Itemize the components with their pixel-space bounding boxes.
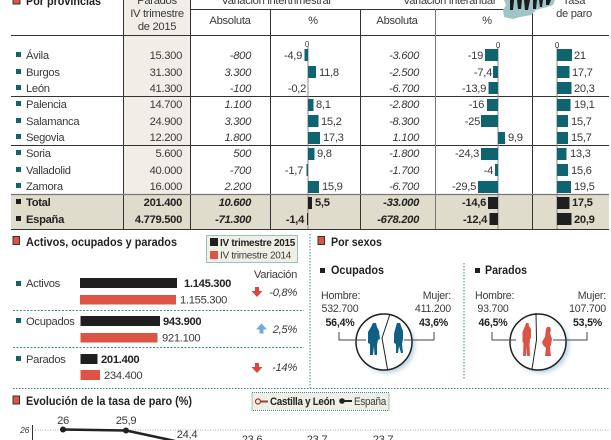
row: ocupados: 943.900 <box>163 316 201 328</box>
line chart: 26 <box>19 425 30 435</box>
row: Valladolid: Valladolid <box>26 165 71 177</box>
row: Burgos <box>16 66 593 79</box>
header: variación: Variación <box>254 269 297 281</box>
legend: castilla y león / españa: Castilla y León <box>270 396 335 408</box>
row: Soria: -1.800 <box>389 148 420 160</box>
row: ocupados: 2,5% <box>272 324 297 336</box>
row: activos: -0,8% <box>269 287 297 299</box>
panel: evolución de la tasa de paro <box>13 392 609 440</box>
row: parados: 201.400 <box>101 354 139 366</box>
row: Total: Total <box>26 197 51 209</box>
row: parados <box>16 354 297 382</box>
row: Ávila: 21 <box>574 50 586 62</box>
row: Total: -33.000 <box>383 197 420 209</box>
row: Zamora <box>16 181 595 193</box>
row: Salamanca: -8.300 <box>389 116 420 128</box>
legend: trimestres: IV trimestre 2014 <box>220 250 291 262</box>
row: Zamora: 16.000 <box>150 181 182 193</box>
row: Ávila: -800 <box>230 50 252 62</box>
table column headers: de 2015 <box>138 21 176 33</box>
legend: trimestres <box>206 236 298 262</box>
row: Burgos: 17,7 <box>572 67 593 79</box>
row: Burgos: 3.300 <box>224 67 252 79</box>
row: Zamora: Zamora <box>26 181 64 193</box>
row: Salamanca: Salamanca <box>26 116 80 128</box>
row: España: -678.200 <box>377 214 420 226</box>
row: activos: 1.155.300 <box>180 294 227 306</box>
row: Ávila <box>16 49 586 62</box>
province rows <box>16 49 595 226</box>
row: parados: Parados <box>26 354 66 366</box>
row: ocupados <box>16 316 297 344</box>
row: España: -12,4 <box>463 214 488 226</box>
axis zero labels: 0 <box>496 41 501 50</box>
row: Valladolid: -1,7 <box>285 165 303 177</box>
row: León: -0,2 <box>288 83 306 95</box>
row: Zamora: 19,5 <box>574 181 595 193</box>
row: Soria: 9,8 <box>317 148 332 160</box>
row: Salamanca: -25 <box>465 116 480 128</box>
group: ocupados: 56,4% <box>325 317 355 329</box>
row: Segovia: 15,7 <box>571 132 592 144</box>
row: León: León <box>26 83 50 95</box>
line chart: 26 <box>57 415 69 427</box>
group: ocupados: Mujer: <box>423 290 451 302</box>
row: Ávila: 15.300 <box>150 50 182 62</box>
row: Palencia: -16 <box>469 99 484 111</box>
row: Valladolid <box>16 164 592 177</box>
axis zero labels: 0 <box>555 41 560 50</box>
heading: evolución: Evolución de la tasa de paro (%) <box>26 394 192 408</box>
table column headers: de paro <box>556 8 592 20</box>
table column headers: Absoluta <box>209 15 252 27</box>
row: parados: -14% <box>272 362 297 374</box>
row: Zamora: -29,5 <box>452 181 476 193</box>
line chart <box>19 415 609 440</box>
row: Valladolid: 40.000 <box>150 165 182 177</box>
legend: trimestres: IV trimestre 2015 <box>220 237 295 249</box>
row: Burgos: -7,4 <box>474 67 492 79</box>
table column headers: % <box>482 15 492 27</box>
line chart: 25,9 <box>116 415 136 427</box>
row: Burgos: -2.500 <box>389 67 420 79</box>
row: León <box>16 82 595 95</box>
row: Valladolid: -1.700 <box>389 165 420 177</box>
row: España: España <box>26 214 65 226</box>
group: parados: Hombre: <box>475 290 514 302</box>
row: Soria: 5.600 <box>156 148 182 160</box>
row: Segovia: 1.800 <box>224 132 252 144</box>
row: parados: 234.400 <box>104 370 142 382</box>
group: parados: Mujer: <box>578 290 606 302</box>
group: parados: 107.700 <box>569 303 606 315</box>
group: ocupados: 43,6% <box>419 317 449 329</box>
row: Zamora: -6.700 <box>389 181 420 193</box>
row: España: 20,9 <box>574 214 595 226</box>
row: Segovia: 9,9 <box>508 132 523 144</box>
legend: castilla y león / españa: España <box>354 396 387 408</box>
row: Total: 5,5 <box>315 197 330 209</box>
row: ocupados: Ocupados <box>26 316 75 328</box>
group: ocupados: Ocupados <box>331 263 384 277</box>
group: ocupados <box>320 263 451 373</box>
panel: por sexos <box>318 235 606 373</box>
row: España <box>16 213 595 226</box>
row: Total <box>16 197 593 209</box>
pie: parados <box>492 313 587 373</box>
row: Soria: 500 <box>233 148 252 160</box>
row: Segovia: Segovia <box>26 132 65 144</box>
row: Palencia: 19,1 <box>574 99 595 111</box>
panel: por provincias table <box>11 0 609 230</box>
row: Ávila: -4,9 <box>284 50 302 62</box>
row: Salamanca: 3.300 <box>224 116 252 128</box>
row: Palencia: 14.700 <box>150 99 182 111</box>
row: Burgos: 31.300 <box>150 67 182 79</box>
row: León: -6.700 <box>389 83 420 95</box>
row: Total: 201.400 <box>144 197 182 209</box>
axis zero labels: 0 <box>305 40 310 49</box>
row: Ávila: -19 <box>468 50 483 62</box>
pie: ocupados <box>339 314 434 373</box>
row: Salamanca: 15,7 <box>571 116 592 128</box>
row: Ávila: Ávila <box>26 49 50 62</box>
row: Soria: Soria <box>26 148 52 160</box>
row: Palencia <box>16 99 595 111</box>
row: Segovia: 1.100 <box>392 132 420 144</box>
row: España: -1,4 <box>286 214 305 226</box>
legend: castilla y león / españa <box>252 392 389 410</box>
row: Palencia: Palencia <box>26 99 68 111</box>
group: ocupados: 532.700 <box>322 303 359 315</box>
row: Valladolid: 15,6 <box>571 165 592 177</box>
row: Valladolid: -4 <box>484 165 493 177</box>
group: parados: 53,5% <box>573 317 603 329</box>
heading: activos, ocupados y parados: Activos, ocupados y parados <box>26 235 177 249</box>
row: Salamanca <box>16 115 592 128</box>
row: España: -71.300 <box>215 214 252 226</box>
row: activos: Activos <box>26 278 61 290</box>
row: España: 4.779.500 <box>135 214 182 226</box>
row: Valladolid: -700 <box>230 165 252 177</box>
row: Segovia <box>16 132 592 144</box>
row: Burgos: 11,8 <box>319 67 339 79</box>
group: parados: 46,5% <box>478 317 508 329</box>
panel: activos, ocupados y parados <box>13 235 298 382</box>
row: Ávila: -3.600 <box>389 50 420 62</box>
row: León: 20,3 <box>574 83 595 95</box>
row: Palencia: -2.800 <box>389 99 420 111</box>
group: parados <box>475 263 606 373</box>
axis zero labels <box>305 40 560 50</box>
row: ocupados: 921.100 <box>162 332 200 344</box>
row: Total: -14,6 <box>462 197 486 209</box>
row: Zamora: 15,9 <box>322 181 343 193</box>
row: Segovia: 12.200 <box>150 132 182 144</box>
table column headers: Absoluta <box>376 15 419 27</box>
group: parados: Parados <box>485 263 527 277</box>
table column headers: IV trimestre <box>130 8 184 20</box>
heading: por sexos: Por sexos <box>331 235 382 249</box>
row: Soria <box>16 148 591 160</box>
row: Palencia: 8,1 <box>316 99 331 111</box>
group: parados: 93.700 <box>477 303 509 315</box>
row: Soria: 13,3 <box>570 148 591 160</box>
group: ocupados: 411.200 <box>415 303 451 315</box>
row: León: -100 <box>230 83 252 95</box>
icon: map with people <box>503 0 555 19</box>
table column headers: % <box>308 15 318 27</box>
row: Total: 17,5 <box>572 197 593 209</box>
row: León: 41.300 <box>150 83 182 95</box>
row: Zamora: 2.200 <box>224 181 252 193</box>
row: Burgos: Burgos <box>26 67 60 79</box>
row: activos: 1.145.300 <box>184 278 231 290</box>
row: Salamanca: 24.900 <box>150 116 182 128</box>
table column headers <box>130 0 592 33</box>
group: ocupados: Hombre: <box>321 290 360 302</box>
row: Salamanca: 15,2 <box>321 116 342 128</box>
row: Soria: -24,3 <box>455 148 479 160</box>
row: Palencia: 1.100 <box>224 99 252 111</box>
row: Total: 10.600 <box>219 197 252 209</box>
row: León: -13,9 <box>462 83 486 95</box>
row: Segovia: 17,3 <box>323 132 344 144</box>
row: activos <box>16 278 297 306</box>
